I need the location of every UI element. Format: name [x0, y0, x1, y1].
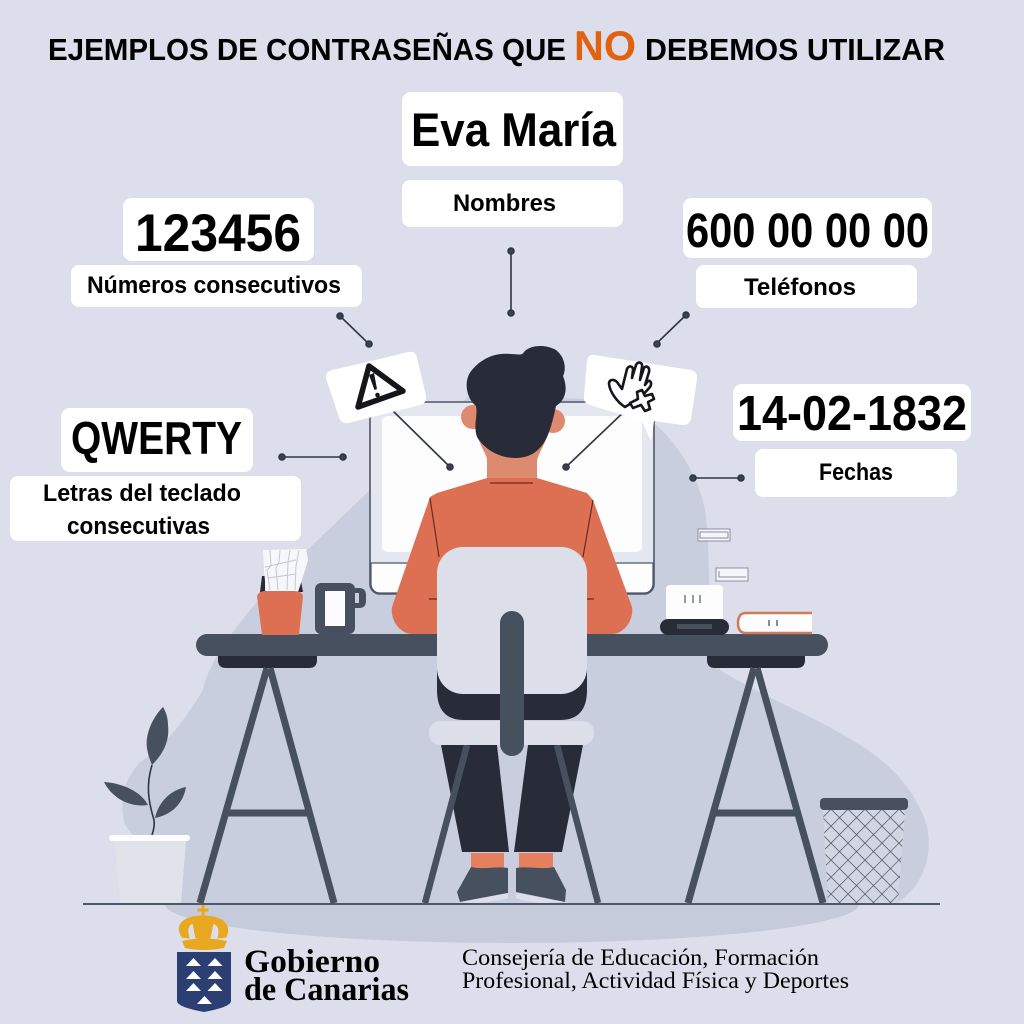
example: date: 14-02-1832: [737, 387, 967, 441]
book: [738, 613, 812, 633]
example: keyboard letters: QWERTY: [71, 412, 242, 464]
wordmark: de Canarias: [244, 972, 409, 1008]
person: [392, 346, 632, 634]
plant pot: [115, 841, 186, 903]
logo: Gobierno de Canarias: [177, 905, 409, 1012]
label: Teléfonos: [696, 265, 917, 308]
shoes: [457, 867, 566, 902]
chair legs: [425, 745, 598, 903]
crown: [179, 905, 228, 950]
label: Números consecutivos: [71, 265, 362, 307]
icon: warning triangle: [358, 366, 403, 407]
icon: hand with cross: [609, 363, 654, 411]
connector lines: [279, 248, 744, 481]
floor shadow: [165, 904, 859, 943]
ears: [461, 405, 565, 433]
title: [48, 22, 945, 69]
plant: [104, 707, 190, 903]
example: name: Eva María: [411, 103, 617, 156]
department text: Consejería de Educación, Formación: [462, 945, 820, 970]
label: Fechas: Fechas: [819, 459, 893, 486]
warning callout: [328, 354, 424, 421]
label: Letras del teclado consecutivas: consecutivas: [67, 513, 210, 540]
example: phone: 600 00 00 00: [686, 205, 929, 258]
neck: [477, 425, 550, 480]
chair base: [437, 665, 587, 720]
title: NO: [574, 22, 636, 69]
label: Nombres: Nombres: [453, 190, 556, 217]
example: consecutive numbers: 123456: [135, 204, 301, 263]
desk: [196, 634, 828, 903]
monitor callout lines: [389, 407, 628, 470]
label: Fechas: [755, 449, 957, 497]
label: Teléfonos: Teléfonos: [744, 274, 856, 301]
wordmark: Gobierno: [244, 944, 380, 980]
small document icons: [698, 529, 748, 581]
hair: [467, 346, 566, 458]
department text: [462, 945, 849, 993]
label: Letras del teclado consecutivas: Letras del teclado: [43, 480, 241, 507]
title: DEBEMOS UTILIZAR: [645, 32, 945, 67]
monitor: [370, 402, 654, 594]
device on desk: [660, 585, 729, 635]
trousers: [441, 745, 583, 852]
label: Nombres: [402, 180, 623, 227]
title: EJEMPLOS DE CONTRASEÑAS QUE: [48, 32, 566, 67]
chair back: [437, 547, 587, 756]
ankles: [471, 853, 553, 869]
hand callout: [584, 355, 697, 441]
label: Números consecutivos: Números consecutivos: [87, 272, 341, 299]
background blob: [122, 395, 929, 903]
example: name: [402, 92, 623, 166]
shoe soles: [460, 893, 565, 903]
chair seat: [429, 721, 594, 745]
department text: Profesional, Actividad Física y Deportes: [462, 968, 849, 993]
pen holder with papers: [257, 549, 308, 635]
wordmark: [244, 944, 409, 1008]
chair and legs: [425, 665, 598, 903]
shield: [177, 952, 231, 1012]
waste basket: [820, 798, 908, 903]
sweater: [392, 478, 632, 634]
floor line: [83, 903, 940, 905]
mug: [315, 583, 366, 634]
label: Letras del teclado consecutivas: [10, 476, 301, 541]
